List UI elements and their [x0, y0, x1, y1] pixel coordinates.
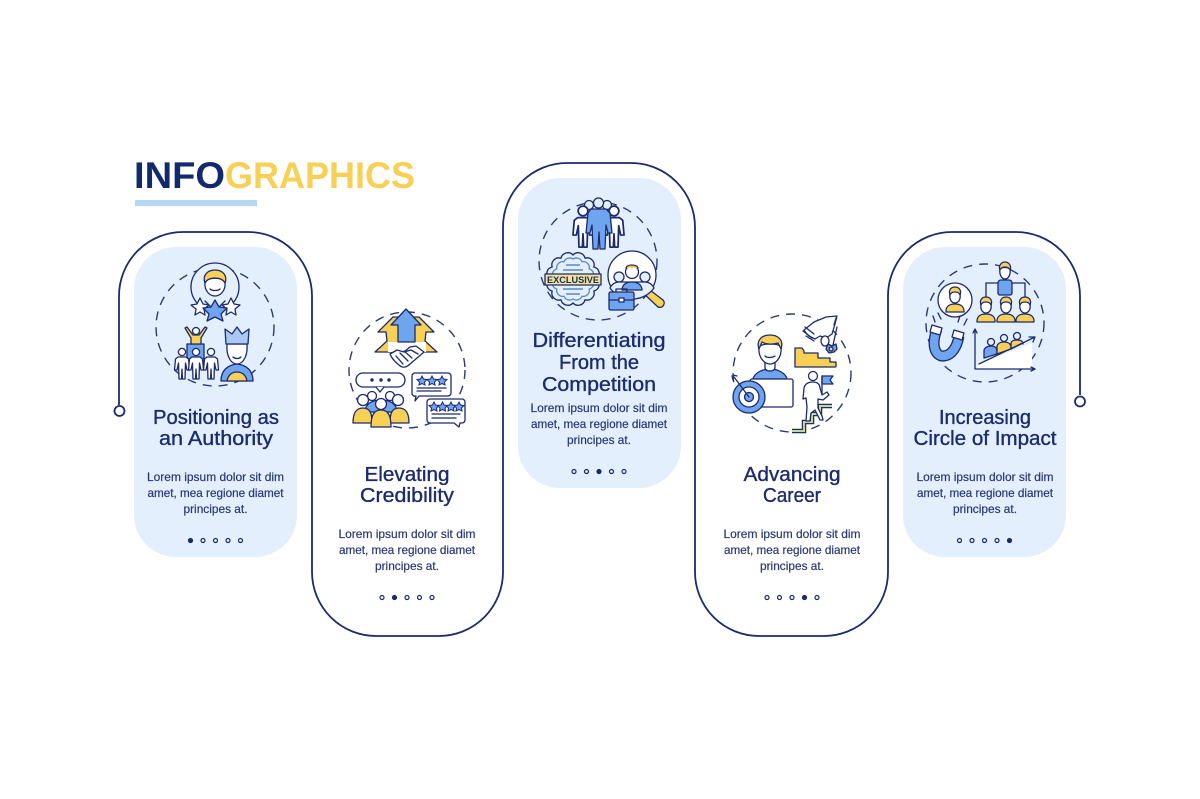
heading: INFO [134, 155, 225, 196]
text: card 2 body: principes at. [375, 559, 439, 573]
title: Positioning as an Authority: an Authority [159, 428, 273, 450]
icon: authority [156, 263, 274, 386]
icon: differentiating: EXCLUSIVE [547, 275, 599, 286]
text: card 1 body: amet, mea regione diamet [148, 486, 284, 500]
text: card 3 body: Lorem ipsum dolor sit dim [530, 401, 668, 415]
title: Increasing Circle of Impact: Circle of Impact [914, 428, 1057, 450]
heading [134, 155, 415, 206]
title: Differentiating From the Competition: Competition [542, 374, 656, 396]
heading: GRAPHICS [225, 155, 415, 196]
icon: career [732, 314, 851, 432]
text: card 1 body: Lorem ipsum dolor sit dim [147, 470, 284, 484]
title: Advancing Career: Advancing [744, 464, 840, 486]
connecting outline [114, 163, 1085, 636]
text: card 2 body [338, 527, 476, 573]
pagination: card 1 [188, 538, 242, 542]
text: card 4 body: amet, mea regione diamet [724, 543, 861, 557]
icon: circle of impact [926, 262, 1044, 382]
text: card 1 body: principes at. [184, 502, 248, 516]
text: card 4 body: principes at. [760, 559, 824, 573]
text: card 5 body: principes at. [953, 502, 1017, 516]
text: card 5 body: amet, mea regione diamet [917, 486, 1054, 500]
text: card 2 body: Lorem ipsum dolor sit dim [338, 527, 476, 541]
pagination: card 2 [380, 596, 434, 600]
title: Positioning as an Authority: Positioning as [153, 407, 279, 429]
title: Differentiating From the Competition [532, 330, 666, 396]
pagination: card 3 [572, 470, 626, 474]
title: Elevating Credibility: Elevating [364, 464, 450, 486]
text: card 5 body: Lorem ipsum dolor sit dim [916, 470, 1054, 484]
title: Advancing Career: Career [763, 485, 821, 507]
text: card 4 body [724, 527, 861, 573]
text: card 3 body [530, 401, 668, 447]
pagination: card 4 [765, 596, 819, 600]
icon: credibility [349, 309, 465, 428]
title: Increasing Circle of Impact [914, 407, 1057, 450]
panel backgrounds [134, 178, 1066, 557]
text: card 4 body: Lorem ipsum dolor sit dim [724, 527, 860, 541]
text: card 1 body [147, 470, 284, 516]
text: card 5 body [916, 470, 1054, 516]
title: Elevating Credibility: Credibility [360, 485, 454, 507]
title: Positioning as an Authority [153, 407, 279, 450]
title: Increasing Circle of Impact: Increasing [939, 407, 1031, 429]
text: card 2 body: amet, mea regione diamet [339, 543, 476, 557]
title: Differentiating From the Competition: From the [559, 352, 639, 374]
icon: differentiating [539, 198, 664, 320]
title: Elevating Credibility [360, 464, 454, 507]
text: card 3 body: principes at. [567, 433, 631, 447]
title: Advancing Career [744, 464, 840, 507]
text: card 3 body: amet, mea regione diamet [531, 417, 668, 431]
title: Differentiating From the Competition: Differentiating [532, 330, 666, 352]
pagination: card 5 [958, 538, 1012, 542]
